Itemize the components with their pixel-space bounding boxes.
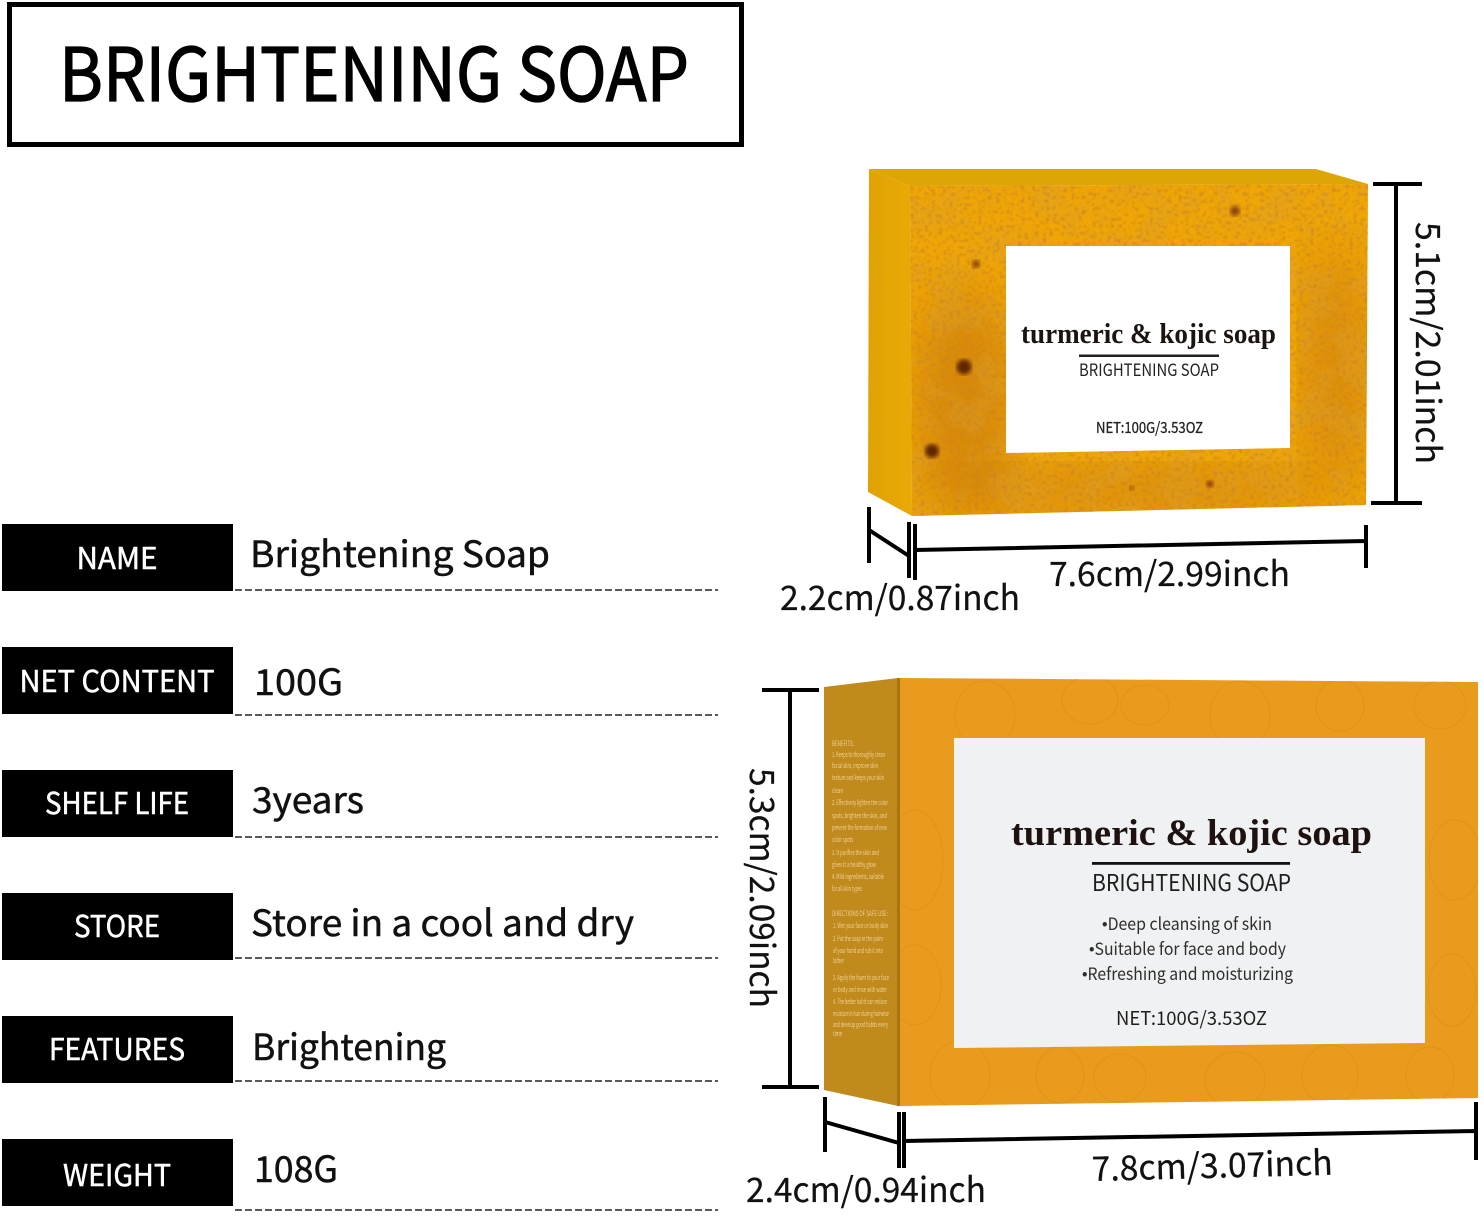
soap label: NET:100G/3.53OZ	[1096, 417, 1203, 438]
box side panel: 4. Mild ingredients, suitable	[832, 872, 884, 882]
dimension: box height: 5.3cm/2.09inch	[740, 768, 789, 1008]
box side panel: time	[833, 1029, 842, 1039]
box side panel: lather	[833, 956, 844, 966]
box side panel: clean	[832, 786, 843, 796]
box label	[954, 738, 1425, 1048]
spec row: shelf life: 3years	[252, 772, 364, 824]
spec row: features: Brightening	[252, 1019, 446, 1071]
box side panel: gives it a healthy glow	[832, 860, 876, 870]
spec row: net content	[2, 647, 718, 715]
box side panel: spots, brighten the skin, and	[832, 811, 887, 821]
spec row: name: Brightening Soap	[250, 526, 550, 578]
box side panel: facial skin, improve skin	[832, 761, 878, 771]
spec row: shelf life	[2, 770, 718, 837]
box label: turmeric & kojic soap	[1011, 813, 1372, 854]
spec row: features	[2, 1016, 718, 1083]
dimension: box height	[740, 690, 819, 1087]
soap label	[1006, 246, 1290, 453]
box label: NET:100G/3.53OZ	[1116, 1004, 1267, 1031]
box front panel	[887, 676, 1481, 1109]
dimension: box width	[904, 1102, 1476, 1191]
box side panel: moisture in hair during hairwear	[833, 1009, 889, 1019]
box side panel: color spots	[832, 835, 853, 845]
spec row: store	[2, 893, 718, 960]
soap label: turmeric & kojic soap	[1021, 319, 1276, 350]
spec row: store: STORE	[74, 902, 160, 946]
dimension: box depth: 2.4cm/0.94inch	[746, 1163, 986, 1212]
spec row: shelf life: SHELF LIFE	[45, 779, 189, 823]
soap label: BRIGHTENING SOAP	[1079, 356, 1219, 381]
spec row: weight	[2, 1139, 718, 1210]
box side panel: 1. Wet your face or body skin	[833, 921, 888, 931]
box side panel	[824, 678, 901, 1106]
box side panel: 4. The better habit can reduce	[833, 997, 887, 1007]
spec row: features: FEATURES	[49, 1025, 185, 1069]
box side panel: 1. Keeps to thoroughly clean	[832, 750, 885, 760]
spec row: net content: 100G	[254, 654, 343, 706]
box side panel: 2. Put the soap in the palm	[833, 934, 883, 944]
soap bar	[868, 169, 1370, 520]
box side panel: texture and keeps your skin	[832, 773, 884, 783]
spec row: name: NAME	[76, 534, 158, 578]
dimension: box depth	[746, 1097, 986, 1212]
spec row: name	[2, 524, 718, 591]
dimension: soap height	[1371, 184, 1455, 503]
box label: BRIGHTENING SOAP	[1092, 864, 1291, 898]
box side panel: 2. Effectively lighten the color	[832, 798, 888, 808]
title: BRIGHTENING SOAP	[59, 17, 689, 123]
title	[10, 4, 742, 144]
dimension: soap depth: 2.2cm/0.87inch	[780, 571, 1020, 620]
box side panel: and develop good habits every	[833, 1020, 888, 1030]
product box	[824, 676, 1481, 1109]
box label: •Deep cleansing of skin	[1102, 910, 1272, 935]
box side panel: or body and rinse with water	[833, 985, 887, 995]
spec row: weight: 108G	[254, 1141, 338, 1193]
dimension: box width: 7.8cm/3.07inch	[1091, 1136, 1333, 1191]
box side panel: 3. Apply the foam to your face	[833, 973, 889, 983]
dimension: soap width: 7.6cm/2.99inch	[1049, 547, 1290, 596]
spec row: store: Store in a cool and dry	[251, 895, 634, 947]
spec row: net content: NET CONTENT	[20, 657, 215, 701]
box side panel: for all skin types	[832, 884, 862, 894]
box side panel: prevent the formation of new	[832, 823, 887, 833]
box label: •Suitable for face and body	[1089, 935, 1286, 960]
box side panel: 3. It purifies the skin and	[832, 848, 879, 858]
box side panel: DIRECTIONS OF SAFE USE:	[832, 909, 888, 919]
box side panel: of your hand and rub it into	[833, 946, 883, 956]
box label: •Refreshing and moisturizing	[1082, 960, 1293, 985]
dimension: soap width	[915, 524, 1366, 596]
box side panel: BENEFITS:	[832, 739, 854, 749]
spec row: weight: WEIGHT	[63, 1151, 171, 1195]
dimension: soap depth	[780, 507, 1020, 620]
dimension: soap height: 5.1cm/2.01inch	[1406, 222, 1455, 464]
